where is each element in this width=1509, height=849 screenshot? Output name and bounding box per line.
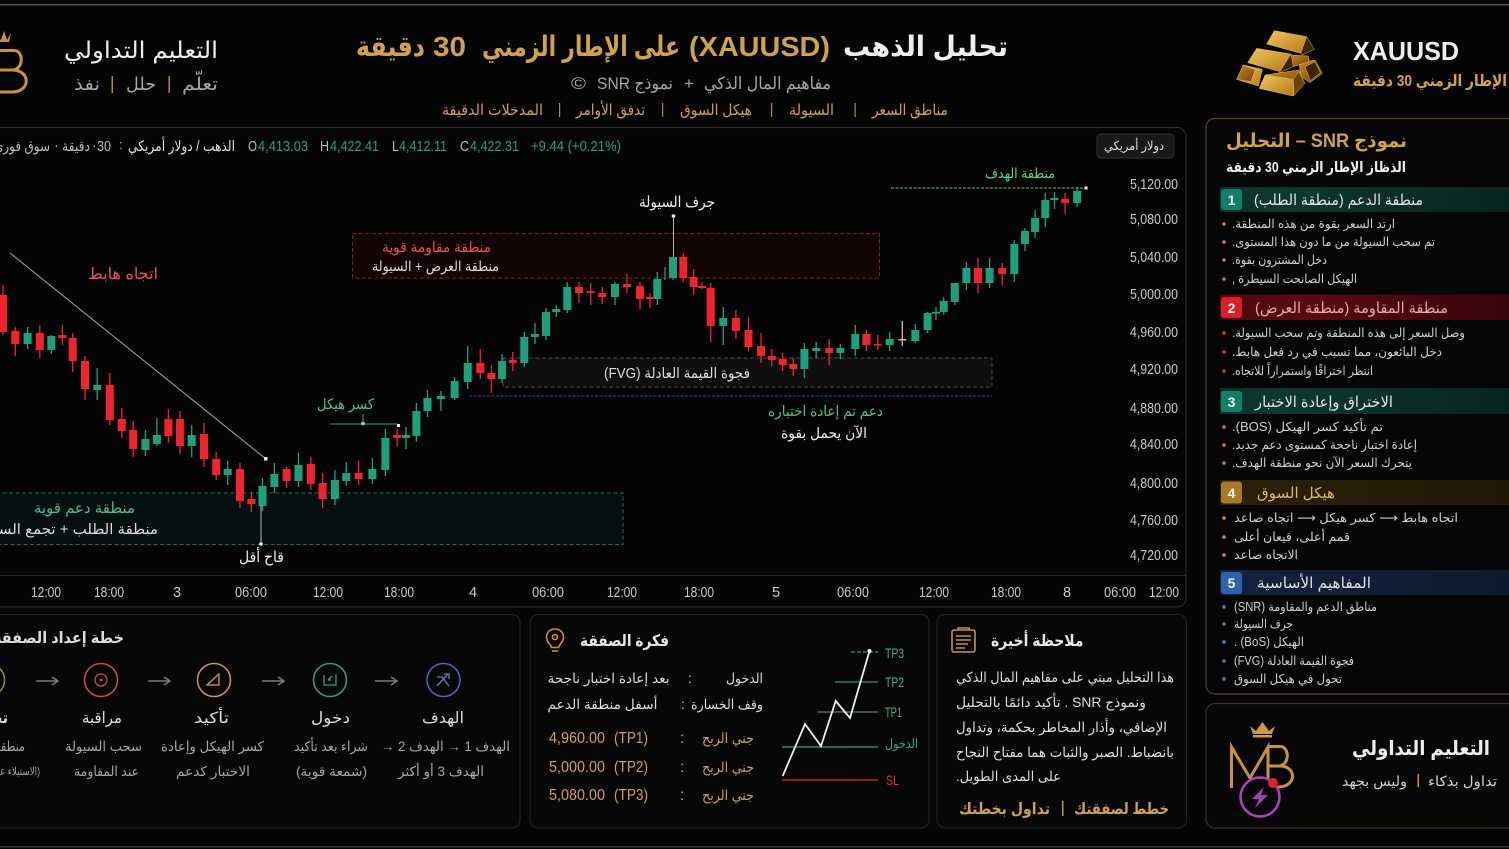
panel: trade setup plan bbox=[0, 614, 520, 828]
section 3: breakout and retest: يتحرك السعر الآن نحو منطقة الهدف. bbox=[1232, 456, 1412, 471]
chart: trade path with levels: TP3 bbox=[885, 646, 904, 661]
fair value gap label: فجوة القيمة العادلة (FVG) bbox=[604, 366, 750, 382]
annotation: target zone bbox=[891, 165, 1088, 190]
icon: MB logo cropped bbox=[0, 31, 26, 92]
analysis subheading: الذظاز الإطار الزمني 30 دقيقة bbox=[1226, 160, 1406, 176]
topic navigation row: المدخلات الدقيقة bbox=[442, 102, 543, 119]
chart legend: دقيقة bbox=[62, 139, 90, 155]
take-profit 3 row: 5,080.00 bbox=[549, 787, 605, 804]
title: دقيقة bbox=[356, 31, 425, 62]
final note body text: على المدى الطويل. bbox=[956, 768, 1061, 785]
section 2: resistance zone bbox=[1220, 294, 1509, 379]
header: brand block top-left bbox=[0, 31, 218, 95]
chart legend: 4,412.11 bbox=[399, 139, 447, 155]
section 1: support zone: الهيكل الصانحت السيطرة , bbox=[1232, 272, 1357, 287]
topic navigation row: تدفق الأوامر bbox=[575, 100, 645, 119]
section 3: breakout and retest: 3 bbox=[1228, 394, 1236, 410]
annotation: lower low: قاح أقل bbox=[239, 547, 284, 566]
take-profit 1 row bbox=[549, 730, 754, 747]
step: target: الهدف bbox=[422, 710, 464, 728]
time axis: 12:00 bbox=[313, 585, 343, 601]
final note body text: بانضباط. الصبر والثبات هما مفتاح النجاح bbox=[956, 744, 1174, 761]
price axis: 5,000.00 bbox=[1130, 287, 1178, 303]
final note body text: الإضافي، وأذار المخاطر بحكمة، وتداول bbox=[956, 718, 1167, 736]
brand tagline bbox=[74, 70, 218, 95]
brand tagline: نفذ bbox=[74, 74, 100, 94]
brand footer name: التعليم التداولي bbox=[1352, 738, 1490, 761]
section 5: key concepts: المفاهيم الأساسية bbox=[1257, 573, 1371, 592]
title: على الإطار الزمني bbox=[482, 31, 680, 63]
resistance zone note: منطقة العرض + السيولة bbox=[372, 258, 499, 275]
price axis: 5,080.00 bbox=[1130, 212, 1178, 228]
section 2: resistance zone: وصل السعر إلى هذه المنطقة وتم سحب السيولة. bbox=[1232, 326, 1465, 341]
subtitle bbox=[571, 74, 831, 94]
section 5: key concepts: تحول في هيكل السوق bbox=[1234, 672, 1342, 687]
take-profit 2 row bbox=[549, 759, 754, 776]
topic navigation row: هيكل السوق bbox=[680, 102, 752, 119]
final note heading: ملاحظة أخيرة bbox=[991, 630, 1084, 650]
symbol name: XAUUSD bbox=[1353, 36, 1459, 66]
support zone label: منطقة دعم قوية bbox=[34, 500, 135, 517]
section 5: key concepts: الهيكل (BoS) . bbox=[1234, 635, 1304, 650]
annotation: liquidity sweep: جرف السيولة bbox=[639, 194, 715, 211]
take-profit 2 row: 5,000.00 bbox=[549, 759, 605, 776]
take-profit 3 row bbox=[549, 787, 754, 804]
annotation: target zone: منطقة الهدف bbox=[985, 165, 1055, 182]
panel: brand footer bbox=[1206, 704, 1509, 828]
arrow: step 2 to 3 bbox=[148, 677, 170, 685]
title: (XAUUSD) bbox=[689, 31, 830, 62]
section 1: support zone: 1 bbox=[1228, 192, 1236, 208]
chart legend: · bbox=[92, 138, 97, 154]
currency button bbox=[1097, 134, 1174, 158]
time axis: 06:00 bbox=[532, 585, 564, 601]
time axis: 12:00 bbox=[1149, 585, 1179, 601]
step: enter: شراء بعد تأكيد bbox=[294, 737, 368, 755]
annotation: retested support: دعم تم إعادة اختباره bbox=[768, 404, 883, 420]
final note body text: هذا التحليل مبني على مفاهيم المال الذكي bbox=[956, 669, 1174, 686]
icon: MB crown logo bbox=[1232, 722, 1293, 816]
icon: clipboard note bbox=[952, 628, 975, 652]
price axis: 5,040.00 bbox=[1130, 250, 1178, 266]
stop-loss row: وقف الخسارة bbox=[691, 697, 763, 713]
step: confirm: كسر الهيكل وإعادة bbox=[161, 739, 265, 755]
step: watch bbox=[65, 664, 142, 780]
chart: trade path with levels: الدخول bbox=[885, 736, 918, 752]
currency button: دولار أمريكي bbox=[1104, 137, 1164, 154]
step: watch: عند المقاومة bbox=[74, 764, 139, 780]
chart legend: الذهب / دولار أمريكي bbox=[128, 136, 235, 155]
stop-loss row bbox=[548, 695, 763, 713]
chart: trade path with levels bbox=[782, 646, 918, 788]
section 3: breakout and retest: إعادة اختبار ناجحة كمستوى دعم جديد. bbox=[1232, 438, 1417, 453]
chart: trade path with levels: TP1 bbox=[885, 705, 902, 720]
time axis: 18:00 bbox=[684, 585, 714, 601]
take-profit 3 row: : bbox=[680, 787, 684, 804]
trade idea heading: فكرة الصفقة bbox=[580, 633, 669, 650]
support zone bbox=[0, 493, 623, 544]
price axis bbox=[1130, 177, 1178, 564]
time axis: 18:00 bbox=[991, 585, 1021, 601]
section 4: market structure: قمم أعلى، قيعان أعلى bbox=[1234, 528, 1350, 545]
chart: trade path with levels: TP2 bbox=[885, 675, 904, 690]
section 5: key concepts bbox=[1220, 570, 1509, 687]
subtitle: نموذج SNR bbox=[597, 74, 673, 94]
section 4: market structure: 4 bbox=[1228, 485, 1236, 501]
chart legend: : bbox=[119, 137, 123, 152]
entry row bbox=[548, 671, 763, 687]
brand tagline: تعلّم bbox=[182, 70, 218, 95]
subtitle: © bbox=[571, 74, 587, 93]
section 5: key concepts: فجوة القيمة العادلة (FVG) bbox=[1234, 654, 1354, 669]
take-profit 1 row: (TP1) bbox=[614, 730, 648, 747]
time axis: 8 bbox=[1063, 585, 1071, 601]
resistance zone label: منطقة مقاومة قوية bbox=[382, 240, 491, 256]
panel: final note bbox=[937, 614, 1186, 828]
annotation: break of structure: كسر هيكل bbox=[317, 397, 374, 413]
chart legend: 4,413.03 bbox=[258, 139, 308, 155]
take-profit 2 row: (TP2) bbox=[614, 759, 648, 776]
time axis: 18:00 bbox=[94, 585, 124, 601]
time axis bbox=[31, 585, 1179, 601]
brand tagline: حلل bbox=[126, 74, 156, 94]
section 4: market structure bbox=[1220, 480, 1509, 562]
brand footer slogan: وليس بجهد bbox=[1342, 773, 1407, 790]
price axis: 5,120.00 bbox=[1130, 177, 1178, 193]
price axis: 4,840.00 bbox=[1130, 437, 1178, 453]
step: confirm: الاختبار كدعم bbox=[176, 764, 250, 780]
take-profit 3 row: جني الربح bbox=[702, 787, 754, 804]
time axis: 06:00 bbox=[1104, 585, 1136, 601]
final note call to action: تداول بخطتك bbox=[959, 801, 1050, 818]
fair value gap zone bbox=[469, 358, 992, 396]
section 1: support zone: تم سحب السيولة من ما دون هذا المستوى. bbox=[1232, 235, 1435, 250]
section 3: breakout and retest: الاختراق وإعادة الاختبار bbox=[1254, 394, 1393, 411]
section 5: key concepts: 5 bbox=[1228, 575, 1236, 591]
section 4: market structure: هيكل السوق bbox=[1257, 485, 1335, 502]
step: target: الهدف 1 → الهدف 2 → bbox=[381, 739, 510, 755]
price axis: 4,880.00 bbox=[1130, 401, 1178, 417]
time axis: 3 bbox=[173, 585, 181, 601]
step: enter: دخول bbox=[311, 710, 350, 727]
price axis: 4,720.00 bbox=[1130, 548, 1178, 564]
step: watch: سحب السيولة bbox=[65, 739, 142, 755]
section 4: market structure: اتجاه هابط ⟶ كسر هيكل ⟶ اتجاه صاعد bbox=[1234, 511, 1458, 526]
chart legend: 4,422.31 bbox=[470, 139, 519, 155]
chart legend: · bbox=[54, 138, 59, 154]
subtitle: مفاهيم المال الذكي bbox=[704, 74, 831, 94]
entry row: : bbox=[688, 671, 692, 686]
step: confirm: تأكيد bbox=[194, 707, 229, 727]
title: 30 bbox=[433, 31, 466, 62]
title: تحليل الذهب bbox=[843, 31, 1008, 62]
step: target bbox=[381, 664, 510, 780]
brand footer slogan: تداول بذكاء bbox=[1428, 773, 1497, 790]
downtrend label: اتجاه هابط bbox=[88, 266, 158, 283]
chart legend: O bbox=[248, 139, 257, 155]
topic navigation row: السيولة bbox=[789, 102, 834, 119]
chart legend: L bbox=[392, 139, 399, 155]
entry row: الدخول bbox=[726, 671, 763, 687]
chart legend: +9.44 (+0.21%) bbox=[531, 139, 621, 155]
brand name: التعليم التداولي bbox=[64, 37, 218, 64]
arrow: step 3 to 4 bbox=[262, 677, 284, 685]
price axis: 4,760.00 bbox=[1130, 513, 1178, 529]
arrow: step 4 to 5 bbox=[375, 677, 397, 685]
final note call to action bbox=[959, 801, 1169, 818]
price axis: 4,800.00 bbox=[1130, 476, 1178, 492]
time axis: 4 bbox=[469, 585, 477, 601]
final note call to action: خطط لصفقتك bbox=[1074, 801, 1169, 818]
icon: light bulb bbox=[546, 629, 564, 651]
final note body text bbox=[956, 669, 1174, 785]
time axis: 18:00 bbox=[384, 585, 414, 601]
panel: SNR model analysis bbox=[1206, 118, 1509, 694]
section 2: resistance zone: 2 bbox=[1228, 300, 1236, 316]
section 4: market structure: الاتجاه صاعد bbox=[1234, 548, 1298, 562]
section 2: resistance zone: انتظر اختراقًا واستمراراً للاتجاه. bbox=[1232, 361, 1373, 379]
section 1: support zone: ارتد السعر بقوة من هذه المنطقة. bbox=[1232, 217, 1395, 232]
annotation: break of structure bbox=[317, 397, 400, 427]
section 1: support zone: منطقة الدعم (منطقة الطلب) bbox=[1254, 192, 1423, 209]
candlesticks bbox=[3, 187, 1077, 512]
section 5: key concepts: مناطق الدعم والمقاومة (SNR) bbox=[1234, 600, 1377, 615]
take-profit 1 row: 4,960.00 bbox=[549, 730, 605, 747]
section 1: support zone bbox=[1220, 187, 1509, 287]
annotation: retested support bbox=[768, 404, 883, 442]
annotation: lower low bbox=[239, 505, 284, 566]
take-profit 3 row: (TP3) bbox=[614, 787, 648, 804]
section 1: support zone: دخل المشترون بقوة. bbox=[1232, 253, 1327, 268]
stop-loss row: : bbox=[681, 697, 685, 712]
section 2: resistance zone: دخل البائعون، مما تسبب في رد فعل هابط. bbox=[1232, 345, 1442, 360]
symbol block top-right bbox=[1353, 36, 1507, 91]
final note body text: ونموذج SNR . تأكيد دائمًا بالتحليل bbox=[956, 692, 1146, 711]
time axis: 12:00 bbox=[919, 585, 949, 601]
chart legend bbox=[0, 136, 621, 155]
stop-loss row: أسفل منطقة الدعم bbox=[548, 695, 658, 713]
brand footer slogan bbox=[1342, 773, 1497, 790]
step: define zone (cropped) bbox=[0, 664, 40, 778]
step: watch: مراقبة bbox=[82, 710, 122, 727]
time axis: 12:00 bbox=[31, 585, 61, 601]
chart legend: C bbox=[460, 139, 469, 155]
time axis: 06:00 bbox=[235, 585, 267, 601]
analysis heading: نموذج SNR – التحليل bbox=[1226, 131, 1407, 152]
subtitle: + bbox=[684, 74, 694, 93]
take-profit 2 row: : bbox=[680, 759, 684, 776]
entry row: بعد إعادة اختبار ناجحة bbox=[548, 671, 670, 687]
section 5: key concepts: جرف السيولة bbox=[1234, 617, 1293, 632]
annotation: retested support: الآن يحمل بقوة bbox=[781, 425, 867, 442]
time axis: 5 bbox=[772, 585, 780, 601]
take-profit 1 row: : bbox=[680, 730, 684, 747]
topic navigation row bbox=[442, 100, 948, 119]
section 3: breakout and retest: تم تأكيد كسر الهيكل (BOS). bbox=[1232, 418, 1384, 435]
title bbox=[356, 31, 1008, 63]
take-profit 2 row: جني الربح bbox=[702, 759, 754, 776]
step: enter bbox=[294, 664, 368, 780]
price axis: 4,960.00 bbox=[1130, 325, 1178, 341]
take-profit 1 row: جني الربح bbox=[702, 730, 754, 747]
resistance zone bbox=[352, 234, 880, 278]
section 2: resistance zone: منطقة المقاومة (منطقة العرض) bbox=[1255, 300, 1448, 317]
chart legend: H bbox=[320, 139, 329, 155]
arrow: step 1 to 2 bbox=[36, 677, 58, 685]
annotation: liquidity sweep bbox=[639, 194, 715, 257]
step: confirm bbox=[161, 664, 265, 780]
topic navigation row: مناطق السعر bbox=[871, 102, 948, 119]
section 3: breakout and retest bbox=[1220, 388, 1509, 471]
chart legend: 4,422.41 bbox=[330, 139, 379, 155]
icon: gold bars bbox=[1237, 31, 1322, 96]
arrow: downtrend line bbox=[10, 253, 268, 460]
panel: price chart bbox=[0, 128, 1186, 607]
price axis: 4,920.00 bbox=[1130, 362, 1178, 378]
panel: trade idea bbox=[530, 614, 929, 828]
chart legend: 30 bbox=[97, 139, 111, 155]
time axis: 12:00 bbox=[607, 585, 637, 601]
time axis: 06:00 bbox=[837, 585, 869, 601]
step: enter: (شمعة قوية) bbox=[296, 764, 367, 780]
chart: trade path with levels: SL bbox=[886, 773, 899, 788]
step: target: الهدف 3 أو أكثر bbox=[397, 762, 484, 780]
